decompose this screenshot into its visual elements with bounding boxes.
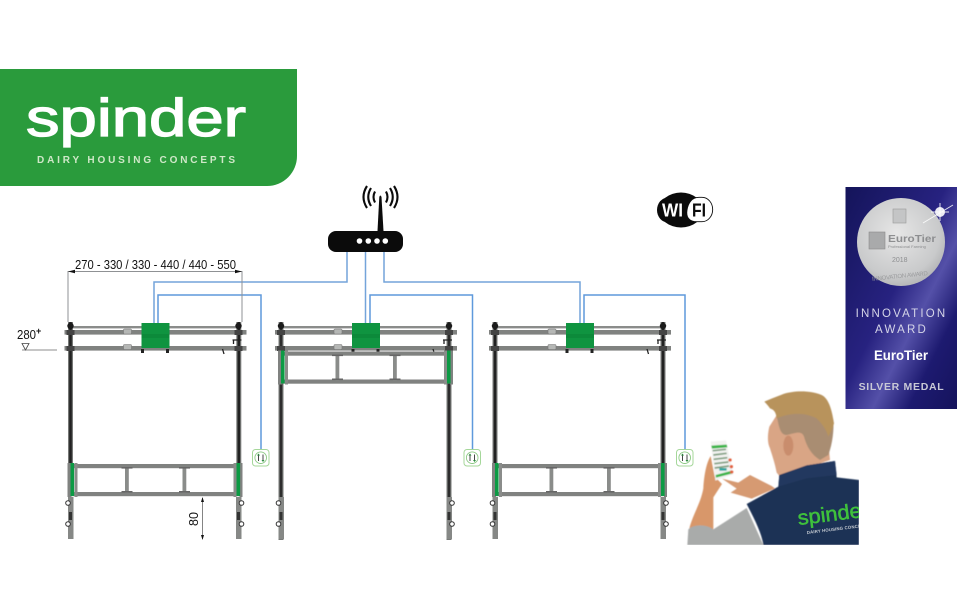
- silver medal: INNOVATION AWARD: [872, 271, 929, 283]
- dimension: height 280: 280: [17, 327, 36, 342]
- vest logo: DAIRY HOUSING CONCEPTS: [806, 522, 870, 535]
- frame 2: [275, 322, 480, 540]
- photo: person using phone app: [687, 391, 871, 545]
- logo panel: [0, 69, 297, 186]
- award text: [856, 308, 947, 393]
- pointing hand: [722, 475, 775, 499]
- silver medal: 2018: [892, 257, 908, 264]
- network cables: [154, 252, 685, 449]
- logo tagline: DAIRY HOUSING CONCEPTS: [37, 155, 235, 166]
- icon: wifi logo: [657, 192, 713, 228]
- dimension: width: [68, 257, 242, 322]
- icon: outlet 1: [252, 450, 269, 466]
- neck and face: [768, 410, 830, 477]
- arm: [689, 456, 722, 529]
- dimension: height 280: +: [36, 326, 41, 336]
- dimension: height 80: [187, 497, 204, 540]
- silver medal: [857, 198, 953, 286]
- frame 3: [489, 322, 693, 539]
- phone: [711, 440, 733, 481]
- award text: INNOVATION: [856, 308, 947, 320]
- vest collar: [778, 461, 837, 487]
- award panel: [846, 187, 957, 409]
- dimension: width: 270 - 330 / 330 - 440 / 440 - 550: [75, 257, 236, 272]
- award text: EuroTier: [874, 347, 929, 363]
- dimension: height 280: [17, 326, 57, 350]
- award text: SILVER MEDAL: [859, 381, 944, 393]
- icon: wifi logo: FI: [692, 200, 706, 220]
- vest logo: spinder: [796, 498, 870, 530]
- medal sparkle: [923, 203, 953, 223]
- icon: wifi router: [328, 186, 403, 252]
- dimension: height 80: 80: [187, 512, 201, 526]
- icon: outlet 2: [464, 450, 480, 466]
- icon: outlet 3: [676, 450, 693, 466]
- icon: wifi logo: WI: [662, 200, 683, 220]
- vest logo: [798, 504, 859, 534]
- frame 1: [64, 322, 269, 540]
- top hair: [764, 391, 834, 437]
- bodywarmer vest: [747, 461, 859, 545]
- logo wordmark: spinder: [26, 89, 246, 148]
- ear: [783, 436, 793, 456]
- silver medal: Professional Farming: [888, 244, 926, 249]
- award text: AWARD: [875, 324, 928, 336]
- shaved hair side: [777, 413, 834, 460]
- silver medal: EuroTier: [888, 233, 936, 245]
- grey shirt: [687, 508, 763, 545]
